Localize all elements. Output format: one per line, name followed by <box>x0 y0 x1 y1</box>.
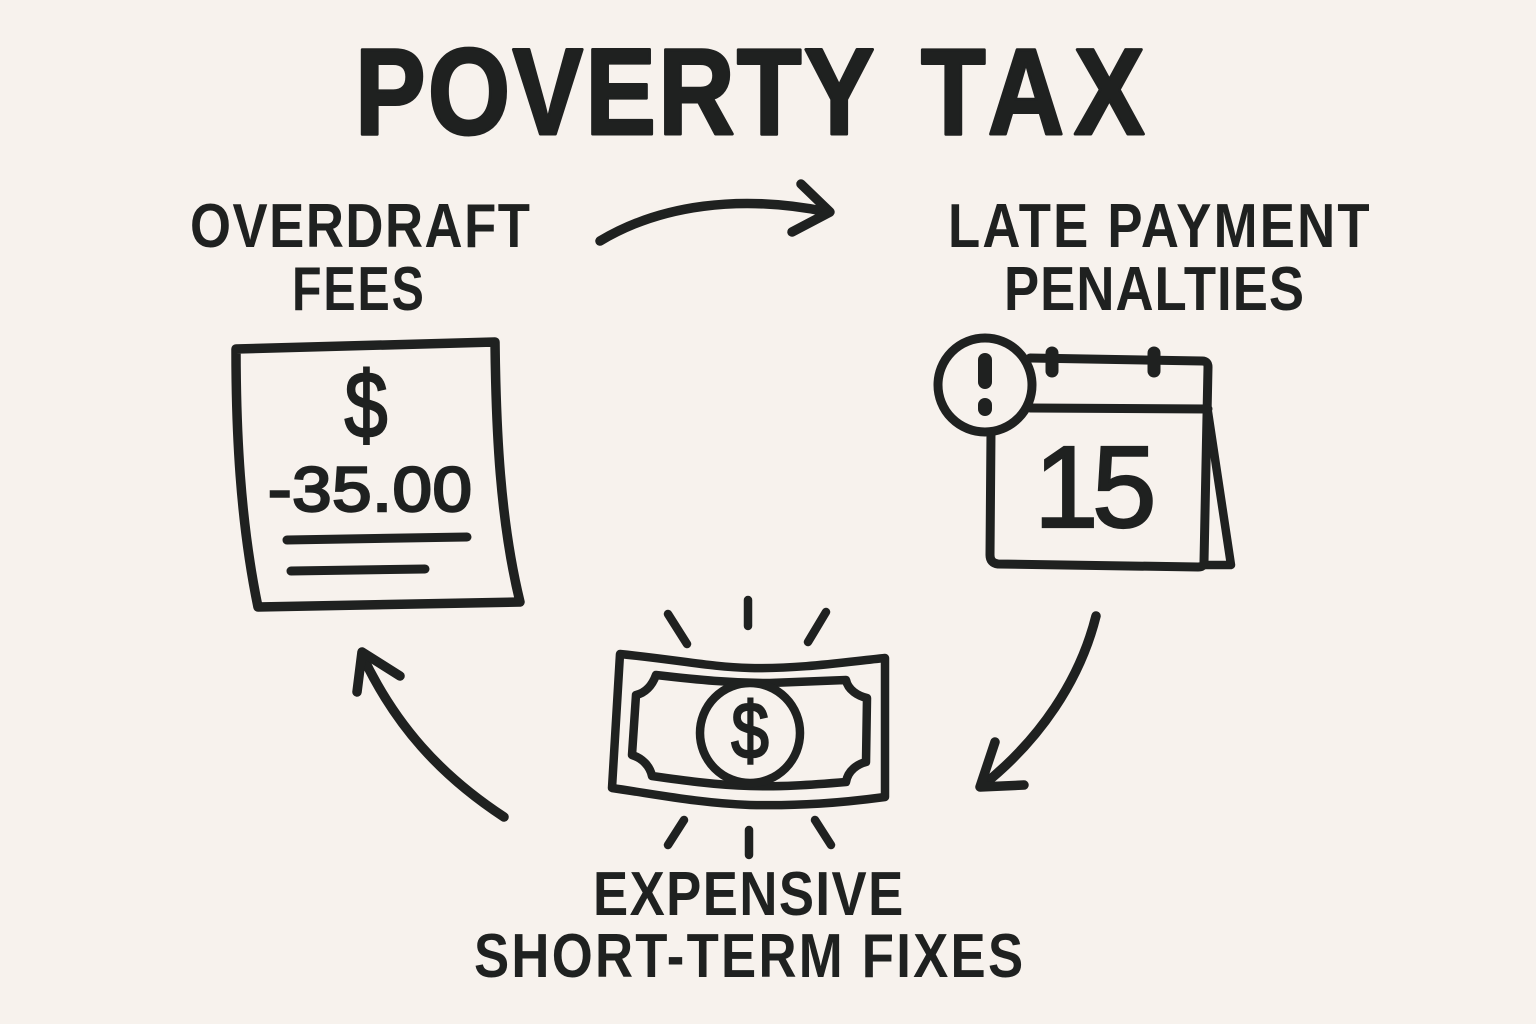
heading: late payment penalties: LATE PAYMENT <box>948 192 1370 261</box>
bill inner border <box>632 675 867 786</box>
heading: late payment penalties <box>948 192 1370 324</box>
title <box>355 24 1145 161</box>
bill outer edge <box>612 654 885 805</box>
heading: late payment penalties: PENALTIES <box>1004 255 1304 324</box>
heading: expensive short-term fixes: EXPENSIVE <box>593 860 903 929</box>
alert badge <box>938 338 1032 432</box>
icon: calendar with alert <box>938 338 1231 567</box>
calendar body <box>990 358 1208 567</box>
title: POVERTY <box>355 24 874 161</box>
heading: overdraft fees: OVERDRAFT <box>190 192 530 261</box>
calendar date: 15 <box>1034 422 1157 552</box>
icon: dollar bill with rays <box>612 600 885 855</box>
arrow: late payment to short-term fixes <box>980 616 1096 787</box>
calendar back page <box>1205 412 1231 565</box>
calendar rings <box>1052 353 1154 371</box>
bill rays <box>668 600 831 855</box>
receipt dollar sign: $ <box>345 353 387 458</box>
receipt amount: -35.00 <box>268 454 472 525</box>
icon: overdraft receipt <box>236 342 520 607</box>
bill dollar sign: $ <box>731 685 769 775</box>
arrow: short-term fixes to overdraft <box>357 652 504 817</box>
heading: expensive short-term fixes: SHORT-TERM FIXES <box>474 922 1023 991</box>
arrow: overdraft to late payment <box>600 184 830 241</box>
heading: overdraft fees: FEES <box>292 254 424 323</box>
heading: overdraft fees <box>190 192 530 323</box>
receipt outline <box>236 342 520 607</box>
bill medallion <box>700 683 800 783</box>
title: TAX <box>921 24 1145 161</box>
calendar header line <box>1030 408 1208 409</box>
receipt lines <box>287 537 467 571</box>
heading: expensive short-term fixes <box>474 860 1023 991</box>
